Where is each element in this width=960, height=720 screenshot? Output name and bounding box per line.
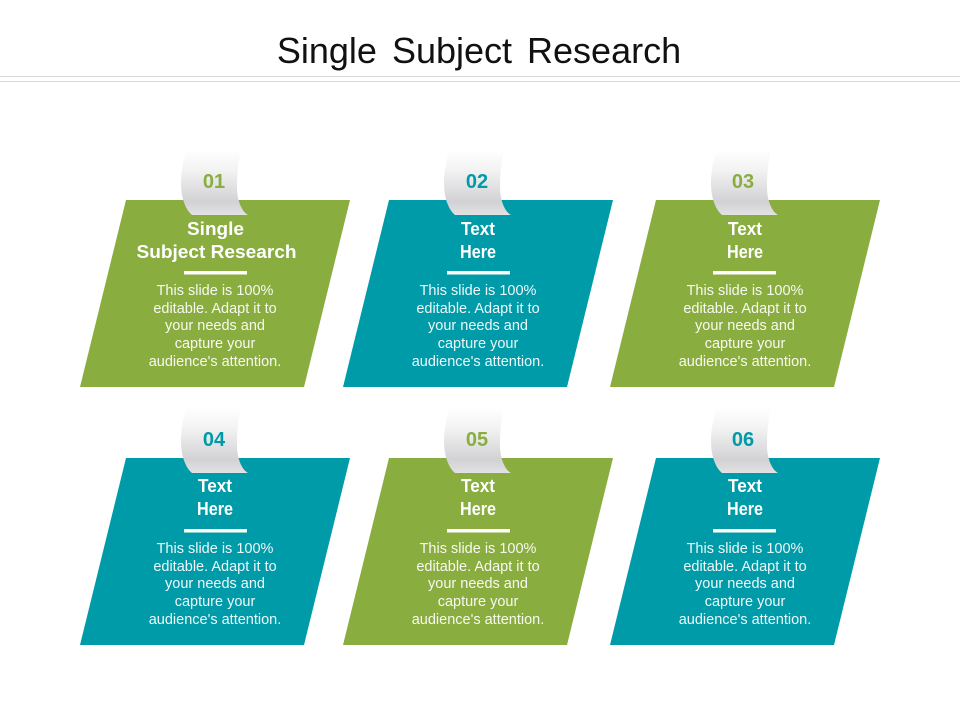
icon: number tab 05 [444, 408, 511, 473]
number 02: 02 [466, 171, 488, 193]
heading 02: Here [460, 242, 496, 262]
body text 06: capture your [705, 594, 785, 610]
panel: card 03 [610, 150, 880, 387]
body text 06: audience's attention. [679, 612, 811, 628]
heading 06: Here [727, 499, 763, 519]
body text 05: capture your [438, 594, 518, 610]
body text 05: your needs and [428, 576, 528, 592]
heading 01: Single [187, 219, 244, 239]
heading 04: Here [197, 499, 233, 519]
heading 04: Text [198, 476, 232, 496]
body text 03: capture your [705, 336, 785, 352]
body text 04: audience's attention. [149, 612, 281, 628]
body text 04: editable. Adapt it to [153, 559, 277, 575]
body text 03: This slide is 100% [687, 283, 804, 299]
panel: card 02 [343, 150, 613, 387]
body text 04: your needs and [165, 576, 265, 592]
number 05: 05 [466, 429, 488, 451]
heading 05: Text [461, 476, 495, 496]
body text 01: audience's attention. [149, 354, 281, 370]
heading 01: Subject Research [136, 242, 296, 262]
body text 06: editable. Adapt it to [683, 559, 807, 575]
body text 02: your needs and [428, 318, 528, 334]
body text 03: audience's attention. [679, 354, 811, 370]
panel: card 06 [610, 408, 880, 645]
number 04: 04 [203, 429, 226, 451]
body text 05: editable. Adapt it to [416, 559, 540, 575]
heading 06: Text [728, 476, 762, 496]
body text 02: editable. Adapt it to [416, 301, 540, 317]
title: Single Subject Research [277, 30, 681, 71]
body text 05: audience's attention. [412, 612, 544, 628]
number 03: 03 [732, 171, 754, 193]
icon: number tab 04 [181, 408, 248, 473]
heading 03: Text [728, 219, 762, 239]
body text 01: your needs and [165, 318, 265, 334]
panel: card 05 [343, 408, 613, 645]
icon: number tab 02 [444, 150, 511, 215]
body text 02: capture your [438, 336, 518, 352]
number 01: 01 [203, 171, 225, 193]
heading 02: Text [461, 219, 495, 239]
heading 05: Here [460, 499, 496, 519]
panel: card 01 [80, 150, 350, 387]
panel: card 04 [80, 408, 350, 645]
heading 03: Here [727, 242, 763, 262]
icon: number tab 01 [181, 150, 248, 215]
body text 02: audience's attention. [412, 354, 544, 370]
body text 02: This slide is 100% [420, 283, 537, 299]
body text 05: This slide is 100% [420, 541, 537, 557]
body text 06: This slide is 100% [687, 541, 804, 557]
body text 03: your needs and [695, 318, 795, 334]
body text 04: capture your [175, 594, 255, 610]
body text 01: capture your [175, 336, 255, 352]
number 06: 06 [732, 429, 754, 451]
body text 01: editable. Adapt it to [153, 301, 277, 317]
body text 01: This slide is 100% [157, 283, 274, 299]
body text 04: This slide is 100% [157, 541, 274, 557]
icon: number tab 03 [711, 150, 778, 215]
body text 03: editable. Adapt it to [683, 301, 807, 317]
icon: number tab 06 [711, 408, 778, 473]
body text 06: your needs and [695, 576, 795, 592]
